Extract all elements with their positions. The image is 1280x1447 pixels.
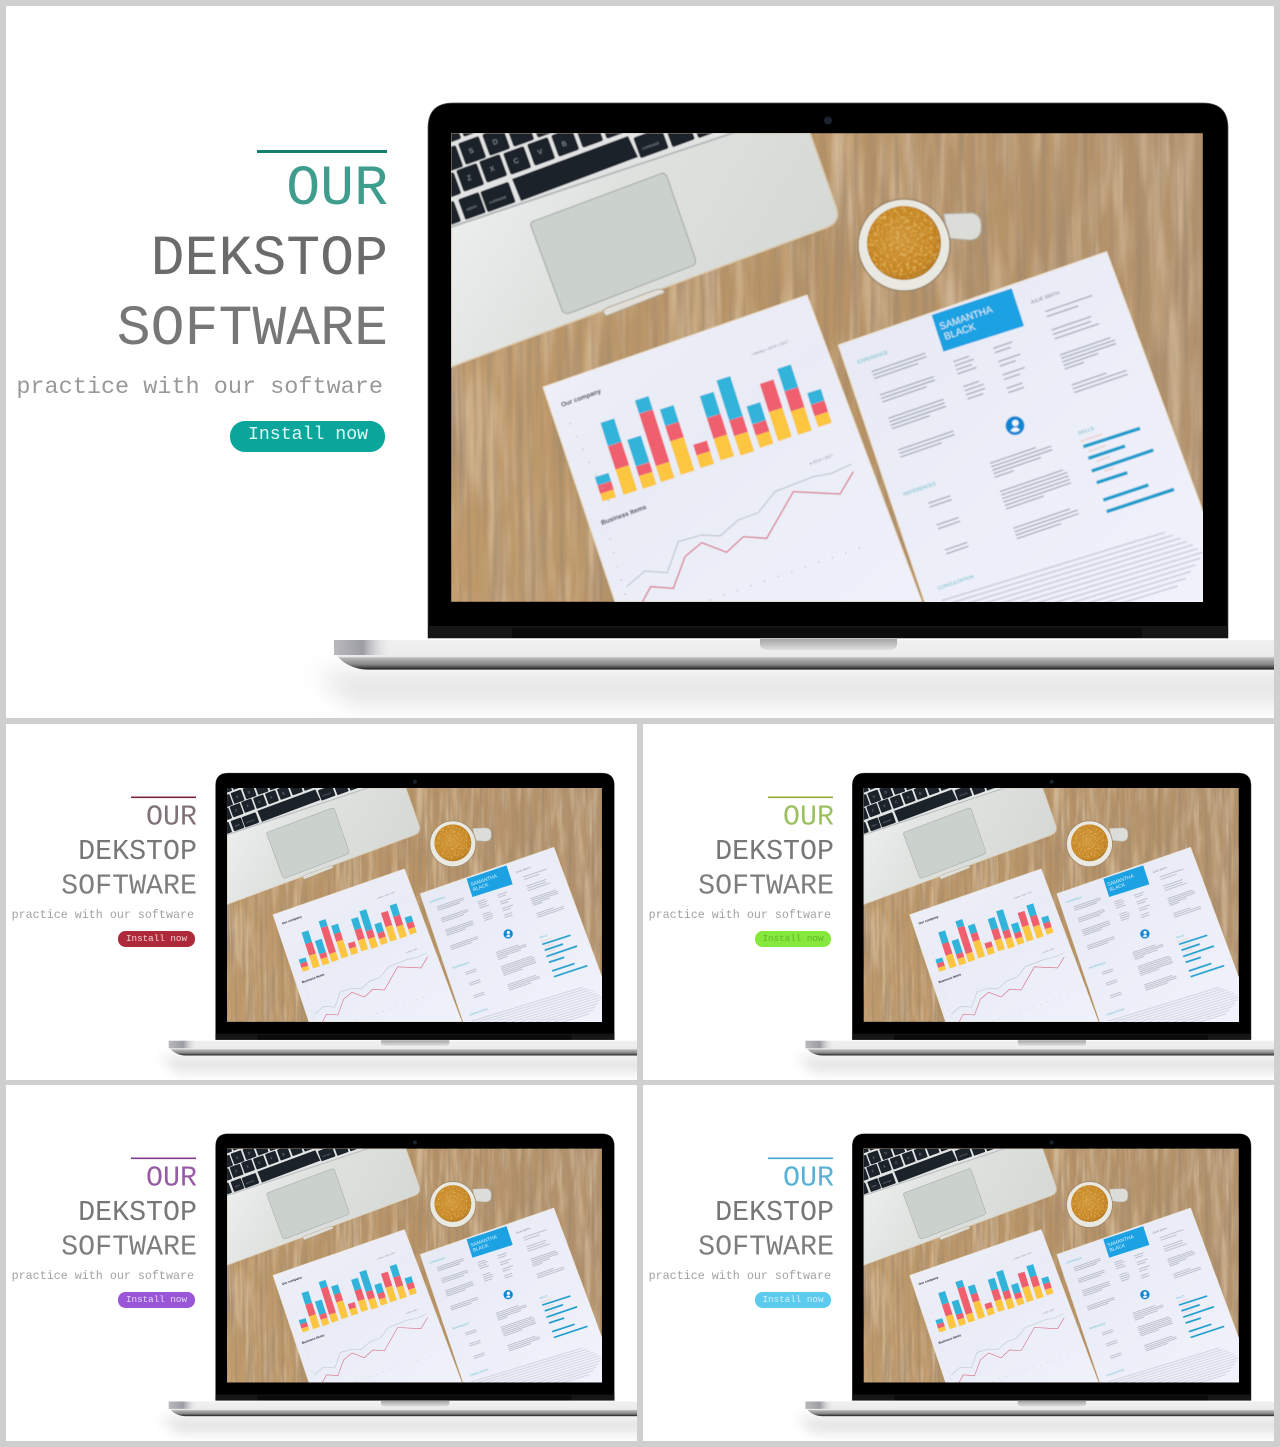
keyboard: D (492, 138, 499, 147)
panel: blue variant (643, 1085, 1280, 1441)
laptop lid bezel (428, 103, 1228, 638)
heading: DEKSTOP (715, 1197, 834, 1229)
base hinge notch (760, 639, 897, 650)
laptop base (334, 639, 1274, 670)
laptop mockup small (796, 772, 1280, 1073)
resume bottom paragraph (942, 524, 1210, 653)
subtitle: practice with our software (16, 374, 383, 401)
keyboard: X (489, 165, 496, 174)
panel: main teal slide (6, 6, 1280, 718)
lower bezel strip (428, 626, 1228, 638)
chart legends: ▪ Series ▪ 2016 ▪ 2017 (751, 339, 790, 357)
chart legends: ● 2016 ▪ 2017 (809, 452, 835, 466)
resume profile icon (1006, 416, 1024, 435)
keyboard: command (641, 140, 660, 151)
laptop mockup small (796, 1133, 1280, 1433)
heading (698, 1162, 834, 1264)
laptop mockup small (159, 1133, 660, 1433)
heading: OUR (146, 1162, 197, 1194)
keyboard: B (561, 140, 568, 149)
subtitle: practice with our software (12, 908, 194, 922)
keyboard: S (468, 147, 475, 156)
heading (61, 1162, 197, 1264)
resume name header: SAMANTHA (938, 304, 994, 333)
desk photo on screen (433, 101, 1210, 653)
resume skill bars (1083, 428, 1174, 512)
accent rule (768, 1158, 833, 1159)
heading (699, 805, 834, 894)
resume section headings: CONSULTATION (937, 574, 975, 592)
install button (118, 931, 195, 947)
wooden desk (451, 133, 1203, 602)
resume name header (932, 288, 1024, 352)
resume section headings: SKILLS (1077, 425, 1096, 437)
laptop mockup small (159, 772, 660, 1073)
subtitle: practice with our software (12, 1269, 194, 1283)
subtitle: practice with our software (649, 908, 831, 922)
install button (755, 931, 831, 947)
keyboard: V (537, 148, 544, 157)
install button (118, 1292, 195, 1308)
resume section headings: REFERENCES (903, 481, 937, 498)
heading: DEKSTOP (78, 836, 197, 868)
accent rule (131, 796, 196, 798)
resume name header: BLACK (943, 322, 978, 343)
subtitle: practice with our software (649, 1269, 831, 1283)
heading: SOFTWARE (117, 297, 388, 361)
heading: OUR (783, 802, 834, 834)
accent rule (768, 796, 833, 798)
keyboard: command (488, 194, 507, 205)
resume text lines (872, 295, 1128, 554)
heading: DEKSTOP (78, 1197, 197, 1229)
coffee cup (858, 199, 981, 291)
panel: red variant (6, 724, 660, 1080)
trackpad (531, 173, 696, 314)
chart titles: Business Items (600, 504, 648, 527)
panel: green variant (643, 724, 1280, 1080)
heading accent rule (257, 150, 387, 153)
line chart (570, 423, 868, 603)
chart titles: Our company (560, 388, 602, 409)
install button: Install now (762, 933, 824, 944)
chart titles (560, 388, 648, 527)
heading (117, 157, 388, 361)
keyboard: Z (466, 174, 473, 183)
heading: SOFTWARE (698, 1232, 834, 1264)
resume section headings: JULIE SMITH (1030, 290, 1061, 306)
install button: Install now (762, 1294, 824, 1305)
paper: bar and line charts (543, 295, 922, 603)
install button: Install now (126, 1294, 187, 1305)
silver laptop body (451, 133, 837, 367)
keyboard: option (466, 203, 477, 212)
heading: DEKSTOP (151, 227, 388, 291)
heading: OUR (146, 802, 197, 834)
stacked bar chart (602, 367, 825, 499)
keyboard: C (513, 157, 520, 166)
resume section headings: EXPERIENCE (857, 350, 890, 366)
heading: SOFTWARE (61, 1232, 197, 1264)
resume section headings (857, 290, 1096, 592)
install button (230, 421, 385, 452)
install button (755, 1292, 831, 1308)
paper: resume (838, 252, 1210, 653)
heading (62, 805, 196, 894)
install button: Install now (126, 933, 187, 944)
panel: purple variant (6, 1085, 660, 1441)
heading: SOFTWARE (61, 870, 197, 902)
accent rule (131, 1158, 196, 1159)
lower bezel centre (512, 628, 1142, 638)
laptop front lip (603, 289, 664, 316)
webcam (824, 116, 832, 124)
chart legends (751, 339, 835, 466)
laptop shadow (315, 672, 1280, 704)
heading: OUR (286, 157, 388, 221)
keyboard (433, 101, 732, 227)
heading: DEKSTOP (715, 836, 834, 868)
laptop mockup with desk photo (315, 101, 1280, 704)
heading: SOFTWARE (698, 870, 834, 902)
install button: Install now (248, 425, 368, 445)
heading: OUR (783, 1162, 834, 1194)
keyboard well edge (451, 133, 733, 227)
